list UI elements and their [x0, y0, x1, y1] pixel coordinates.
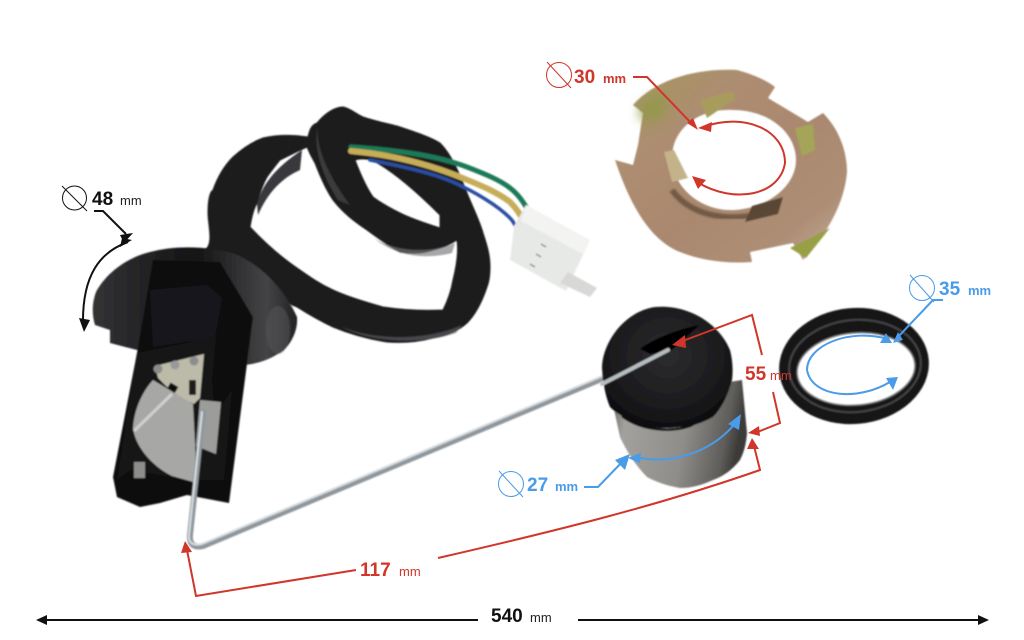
dimension: 55 mm [672, 315, 792, 436]
dimension: 48 mm: mm [120, 193, 142, 208]
diameter symbol [62, 186, 87, 211]
connector [510, 205, 597, 297]
dimension: 117 mm: mm [399, 564, 421, 579]
sealing ring [774, 302, 934, 430]
float cylinder [612, 380, 747, 488]
float cap [602, 307, 733, 428]
dimension: 30 mm [546, 62, 785, 195]
dimension: 540 mm overall [36, 606, 989, 627]
coloured wires [351, 147, 530, 232]
dimension: 48 mm [62, 186, 142, 332]
dimension: 27 mm: mm [555, 479, 578, 494]
dimension: 117 mm: 117 [360, 560, 391, 581]
wiper sector [133, 380, 221, 483]
flange [93, 247, 297, 365]
lock plate [615, 70, 847, 263]
dimension: 27 mm: 27 [527, 475, 548, 496]
dimension: 30 mm: mm [603, 71, 626, 86]
dimension: 30 mm: 30 [574, 67, 595, 88]
dimension: 35 mm [807, 275, 991, 394]
wiring harness [205, 107, 597, 342]
float [602, 307, 747, 488]
dimension: 27 mm [498, 414, 741, 497]
sender head [93, 247, 297, 507]
value: 48 [92, 189, 113, 210]
float arm rod [189, 349, 668, 547]
dimension: 55 mm: 55 [745, 364, 767, 385]
dimension: 540 mm overall: mm [530, 610, 552, 625]
dimension: 55 mm: mm [770, 368, 792, 383]
dimension: 117 mm [181, 438, 760, 596]
leader arrow [83, 211, 128, 325]
dimension: 35 mm: 35 [939, 279, 961, 300]
body [113, 260, 253, 507]
circuit board [154, 354, 204, 404]
dimension: 540 mm overall: 540 [491, 606, 523, 627]
cable sleeve [205, 107, 490, 342]
dimension: 35 mm: mm [968, 283, 991, 298]
